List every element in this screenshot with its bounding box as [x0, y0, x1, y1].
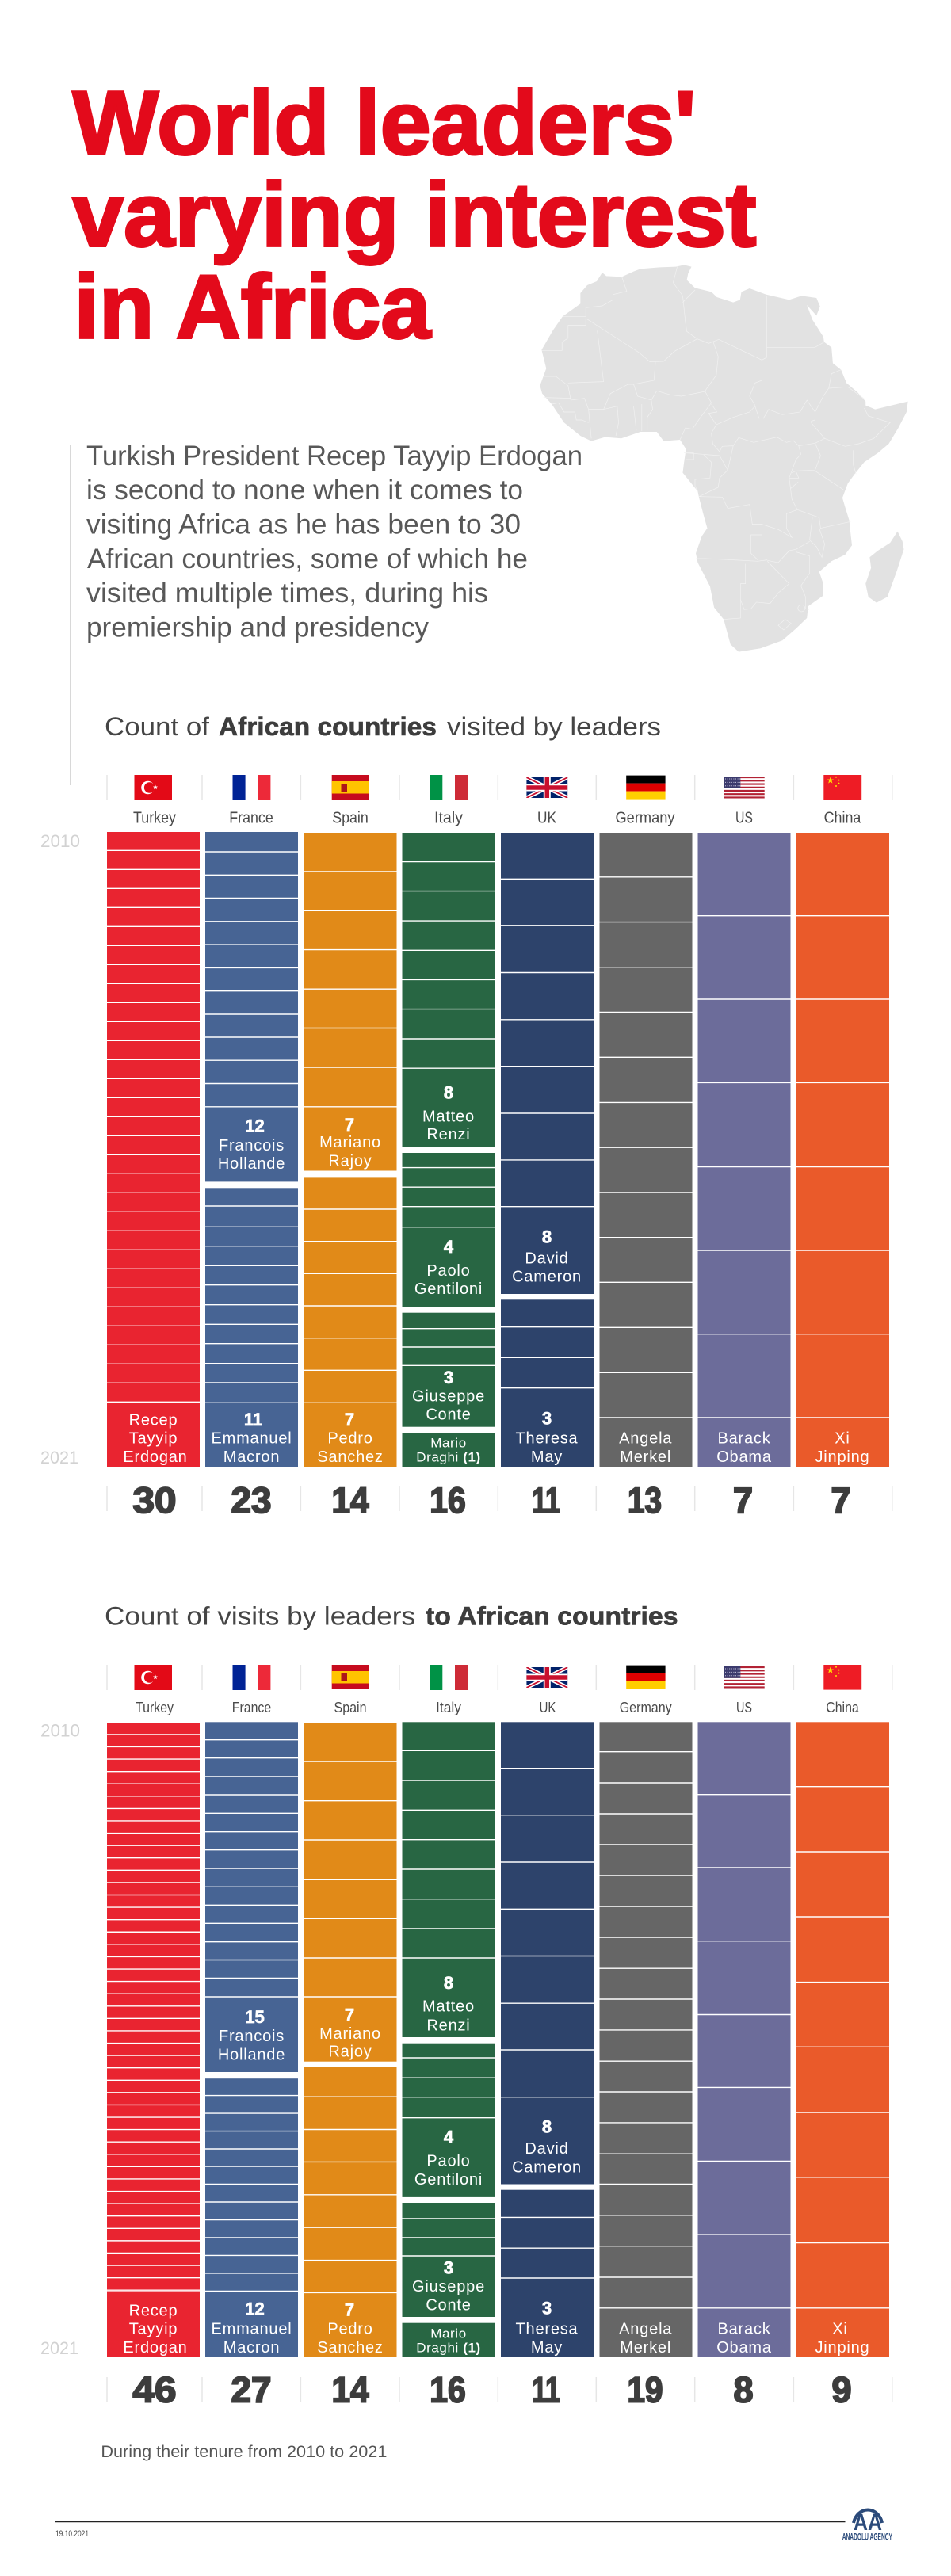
leader: Draghi: Draghi (1) [416, 1450, 481, 1465]
leader: Cameron: Cameron [512, 1269, 582, 1286]
leader: Macron: 11 [244, 1410, 262, 1429]
year label: 2010: 2010 [40, 1721, 80, 1741]
chart 2: visits to African countries [107, 1722, 889, 2357]
column: US [697, 833, 791, 1467]
leader: Obama: Obama [716, 1448, 772, 1466]
heading: chart 1 [105, 712, 661, 741]
leader: Cameron: 8 [542, 2117, 552, 2137]
leader: Xi: Xi [835, 1430, 850, 1448]
logo: Anadolu Agency [842, 2509, 892, 2543]
leader: Hollande: 15 [245, 2007, 265, 2027]
totals: chart 1: 30 [133, 1480, 176, 1521]
leader: Rajoy [319, 2005, 381, 2061]
year label: 2021: 2021 [40, 2338, 78, 2358]
leader: Sanchez [317, 1410, 384, 1466]
country labels: chart 2: Spain [334, 1700, 366, 1715]
leader: Draghi [416, 2326, 481, 2355]
leader: Sanchez: Pedro [327, 1430, 373, 1448]
flag: US [724, 777, 744, 799]
leader: Obama [716, 2320, 772, 2357]
country labels: chart 2: Turkey [136, 1700, 174, 1715]
country labels: chart 2: UK [539, 1700, 556, 1715]
leader: Merkel [619, 1430, 672, 1466]
leader: Obama: Obama [716, 2339, 772, 2357]
leader: Renzi: Matteo [422, 1108, 475, 1125]
flag: UK [526, 1667, 567, 1688]
totals: chart 2: 19 [628, 2369, 663, 2410]
country labels: chart 2: Germany [620, 1700, 672, 1715]
leader: Hollande [218, 1116, 285, 1173]
title: World leaders' [73, 73, 696, 174]
column: Spain [304, 1723, 396, 2357]
leader: Draghi: Mario [430, 1436, 467, 1451]
column: UK [501, 1722, 594, 2357]
column: Italy [403, 833, 495, 1467]
leader: Sanchez: Sanchez [317, 1448, 384, 1466]
totals: chart 2: 8 [733, 2369, 754, 2410]
leader: Renzi: Renzi [426, 1126, 471, 1143]
leader: Cameron: 8 [542, 1227, 552, 1246]
leader: Draghi [416, 1436, 481, 1465]
leader: Hollande: Hollande [218, 2047, 285, 2064]
leader: May: Theresa [516, 1430, 579, 1448]
leader: Rajoy: 7 [345, 2005, 354, 2025]
description text: visited multiple times, during his [86, 578, 488, 609]
description text: Turkish President Recep Tayyip Erdogan [86, 441, 582, 471]
leader: Cameron [512, 1227, 582, 1286]
column: China [796, 833, 889, 1467]
description text: African countries, some of which he [87, 544, 528, 574]
leader: Merkel [619, 2320, 672, 2357]
leader: Macron: Macron [223, 1448, 280, 1466]
leader: May: 3 [542, 2298, 552, 2318]
title: varying interest [73, 165, 756, 266]
leader: Cameron [512, 2117, 582, 2177]
leader: Gentiloni: 4 [444, 2127, 454, 2147]
leader: Rajoy: Rajoy [328, 1152, 372, 1170]
leader: Erdogan: Tayyip [129, 2320, 178, 2337]
leader: Hollande: Francois [219, 1137, 285, 1154]
leader: Hollande: 12 [245, 1116, 265, 1136]
column: Spain [304, 833, 396, 1467]
leader: May [516, 2298, 579, 2357]
leader: Xi: Xi [832, 2320, 848, 2337]
leader: Conte: 3 [444, 2257, 453, 2277]
leader: Renzi [422, 1082, 475, 1143]
title [73, 73, 756, 358]
leader: Erdogan [123, 2303, 188, 2357]
totals: chart 2: 14 [331, 2369, 369, 2410]
leader: Renzi: 8 [444, 1973, 453, 1993]
leader: Erdogan: Erdogan [123, 2339, 188, 2357]
leader: Obama: Barack [717, 2320, 771, 2337]
flag: Spain [332, 1665, 369, 1689]
heading: chart 2: Count of visits by leaders [105, 1602, 415, 1631]
leader: Macron: 12 [245, 2299, 265, 2318]
flag: China [823, 775, 861, 800]
country labels: chart 1: China [824, 810, 861, 827]
heading: chart 2: to African countries [426, 1602, 678, 1631]
flag: Spain [332, 775, 369, 800]
leader: May: Theresa [516, 2320, 579, 2337]
totals: chart 1: 11 [533, 1480, 560, 1521]
leader: Rajoy: 7 [345, 1115, 354, 1135]
leader: Macron: Emmanuel [211, 2320, 292, 2337]
country labels: chart 2: China [826, 1700, 860, 1715]
column: France [205, 1722, 298, 2357]
leader: Obama: Barack [717, 1430, 771, 1448]
leader: Renzi: Renzi [426, 2017, 471, 2034]
leader: Macron: Macron [223, 2339, 280, 2357]
leader: Conte [412, 1368, 485, 1424]
totals: chart 1: 13 [628, 1480, 662, 1521]
column: Germany [599, 833, 693, 1467]
flag: Italy [430, 775, 468, 800]
heading: chart 1: African countries [219, 712, 437, 741]
description text [86, 441, 582, 643]
leader: Rajoy: Mariano [319, 1134, 381, 1151]
leader: Rajoy: Mariano [319, 2025, 381, 2043]
leader: Macron: Emmanuel [211, 1430, 292, 1448]
totals: chart 2: 46 [133, 2369, 176, 2410]
flag: Italy [430, 1665, 468, 1690]
leader: Merkel: Angela [619, 1430, 672, 1448]
leader: Xi [815, 2320, 869, 2357]
flags row: chart 1 [135, 775, 861, 800]
column: China [796, 1722, 889, 2357]
column: US [697, 1722, 791, 2357]
leader: Renzi: Matteo [422, 1998, 475, 2015]
country labels: chart 1: US [735, 810, 753, 827]
footnote: During their tenure from 2010 to 2021 [101, 2443, 387, 2461]
leader: Rajoy: Rajoy [328, 2044, 372, 2061]
totals: chart 2 [133, 2369, 852, 2410]
totals: chart 1: 14 [331, 1480, 369, 1521]
leader: Sanchez: 7 [345, 2299, 354, 2320]
leader: Xi: Jinping [815, 2339, 869, 2357]
leader: Cameron: Cameron [512, 2159, 582, 2177]
leader: Hollande: Hollande [218, 1155, 285, 1173]
leader: Cameron: David [525, 1250, 569, 1267]
leader: Sanchez: 7 [345, 1410, 354, 1429]
country labels: chart 1: Germany [615, 810, 675, 827]
flag: France [233, 1665, 270, 1690]
leader: Gentiloni: 4 [444, 1237, 454, 1257]
leader: Conte: Giuseppe [412, 2278, 485, 2296]
column: Turkey [107, 1723, 200, 2357]
leader: Conte: Giuseppe [412, 1387, 485, 1405]
logo: Anadolu Agency: ANADOLU AGENCY [842, 2533, 892, 2543]
leader: Gentiloni: Gentiloni [414, 1280, 483, 1298]
country labels: chart 2: Italy [436, 1700, 461, 1715]
leader: Erdogan: Tayyip [129, 1430, 178, 1448]
leader: Merkel: Merkel [620, 2339, 671, 2357]
column: Turkey [107, 832, 200, 1467]
flag: Germany [626, 1666, 666, 1689]
leader: May: 3 [542, 1409, 552, 1429]
totals: chart 1: 7 [733, 1480, 753, 1521]
leader: Conte: 3 [444, 1368, 453, 1387]
country labels: chart 2 [136, 1700, 860, 1715]
leader: Gentiloni: Gentiloni [414, 2171, 483, 2189]
totals: chart 2: 16 [430, 2369, 466, 2410]
leader: Gentiloni: Paolo [426, 1262, 471, 1280]
leader: Xi [815, 1430, 869, 1466]
totals: chart 2: 11 [533, 2369, 560, 2410]
totals: chart 2: 27 [231, 2369, 271, 2410]
description text: premiership and presidency [86, 612, 429, 643]
country labels: chart 1: Turkey [133, 810, 176, 827]
column: France [205, 832, 298, 1467]
heading: chart 2 [105, 1602, 678, 1631]
chart 1: African countries visited [107, 832, 889, 1467]
totals: chart 1: 16 [430, 1480, 466, 1521]
country labels: chart 1: France [229, 810, 273, 827]
map: Africa [540, 265, 908, 652]
flag: Turkey [135, 1665, 172, 1690]
country labels: chart 1: UK [537, 810, 557, 827]
heading: chart 1: Count of [105, 712, 209, 741]
logo: Anadolu Agency: AA [854, 2509, 882, 2536]
leader: Conte: Conte [426, 2296, 472, 2314]
flags row: chart 2 [135, 1665, 861, 1690]
heading: chart 1: visited by leaders [447, 712, 661, 741]
flag: China [823, 1665, 861, 1690]
leader: Obama [716, 1430, 772, 1466]
vertical accent rule [70, 445, 71, 785]
country labels: chart 1 [133, 810, 861, 827]
totals: chart 1 [133, 1480, 851, 1521]
year label: 2010: 2010 [40, 831, 80, 851]
column: Italy [403, 1722, 495, 2357]
leader: Merkel: Angela [619, 2320, 672, 2337]
leader: Draghi: Mario [430, 2326, 467, 2341]
leader: Cameron: David [525, 2140, 569, 2158]
country labels: chart 2: France [232, 1700, 271, 1715]
leader: Sanchez: Sanchez [317, 2339, 384, 2357]
leader: Hollande: Francois [219, 2028, 285, 2045]
leader: Hollande [218, 2007, 285, 2064]
leader: Erdogan: Recep [129, 2303, 178, 2320]
leader: Renzi: 8 [444, 1082, 453, 1102]
leader: Erdogan: Erdogan [123, 1448, 188, 1466]
leader: Sanchez: Pedro [327, 2320, 373, 2337]
date: 19.10.2021 [55, 2529, 89, 2539]
totals: chart 1: 7 [831, 1480, 851, 1521]
flag: Germany [626, 776, 666, 800]
leader: Gentiloni: Paolo [426, 2152, 471, 2170]
flag: Turkey [135, 775, 172, 800]
leader: Gentiloni [414, 1237, 483, 1298]
column: Germany [599, 1722, 693, 2357]
leader: Macron [211, 2299, 292, 2357]
flag: France [233, 775, 270, 800]
leader: May: May [531, 2339, 563, 2357]
flag: US [724, 1666, 744, 1688]
column: UK [501, 833, 594, 1467]
country labels: chart 1: Spain [332, 810, 369, 827]
description text: is second to none when it comes to [86, 475, 523, 506]
leader: Macron [211, 1410, 292, 1466]
description text: visiting Africa as he has been to 30 [86, 509, 521, 540]
year label: 2021: 2021 [40, 1448, 78, 1467]
flag: UK [526, 777, 567, 798]
leader: May: May [531, 1448, 563, 1466]
leader: Merkel: Merkel [620, 1448, 671, 1466]
leader: Rajoy [319, 1115, 381, 1170]
leader: Xi: Jinping [815, 1448, 869, 1466]
leader: Gentiloni [414, 2127, 483, 2189]
title: in Africa [74, 257, 432, 358]
leader: Draghi: Draghi (1) [416, 2341, 481, 2355]
country labels: chart 2: US [736, 1700, 752, 1715]
country labels: chart 1: Italy [434, 810, 463, 827]
leader: May [516, 1409, 579, 1466]
leader: Erdogan [123, 1411, 188, 1466]
leader: Conte [412, 2257, 485, 2314]
leader: Sanchez [317, 2299, 384, 2357]
totals: chart 1: 23 [231, 1480, 271, 1521]
leader: Conte: Conte [426, 1406, 472, 1424]
leader: Erdogan: Recep [129, 1411, 178, 1429]
totals: chart 2: 9 [831, 2369, 852, 2410]
leader: Renzi [422, 1973, 475, 2034]
